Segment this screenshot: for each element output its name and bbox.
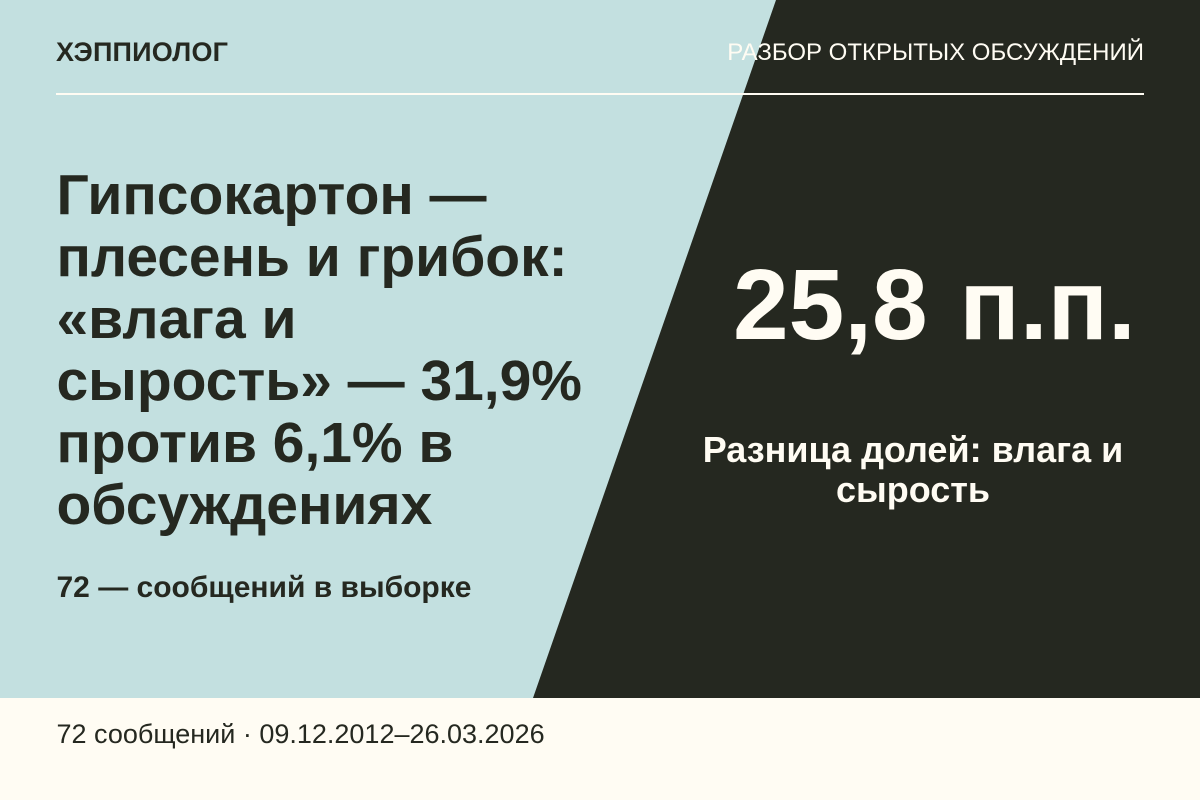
headline: плесень и грибок:	[56, 225, 568, 289]
headline: «влага и	[56, 287, 296, 351]
key number caption: Разница долей: влага и	[703, 429, 1123, 470]
sample size note: 72 — сообщений в выборке	[56, 571, 471, 604]
headline: Гипсокартон —	[56, 163, 487, 227]
key number caption: сырость	[836, 469, 990, 510]
key number: 25,8 п.п.	[733, 249, 1136, 361]
headline: сырость» — 31,9%	[56, 349, 582, 413]
key number caption	[703, 429, 1123, 510]
brand name: ХЭППИОЛОГ	[56, 37, 228, 67]
footer: 72 сообщений · 09.12.2012–26.03.2026	[56, 719, 545, 749]
headline: против 6,1% в	[56, 411, 453, 475]
headline	[56, 163, 582, 537]
header caption: РАЗБОР ОТКРЫТЫХ ОБСУЖДЕНИЙ	[727, 39, 1144, 66]
headline: обсуждениях	[56, 473, 432, 537]
